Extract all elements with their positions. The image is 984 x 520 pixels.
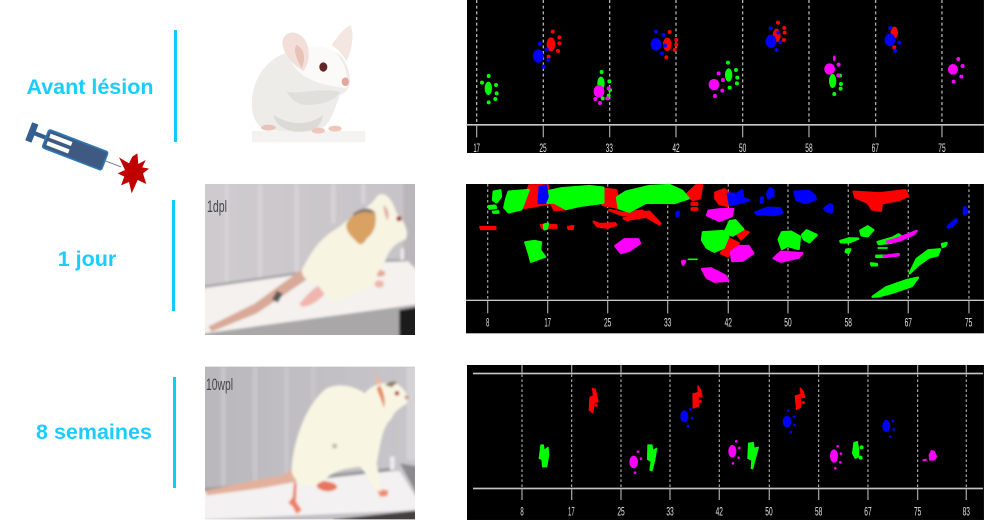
label: 8 semaines: 8 semaines bbox=[36, 420, 152, 444]
chart: gait trace before lesion: 25 bbox=[539, 142, 547, 155]
divider bar: 8 semaines bbox=[173, 377, 176, 488]
chart: gait trace 8 weeks after lesion: 67 bbox=[864, 505, 872, 518]
chart: gait trace before lesion: 42 bbox=[672, 142, 680, 155]
chart: gait trace before lesion: 75 bbox=[938, 142, 946, 155]
photo: rat 8 weeks post lesion (10wpl) bbox=[200, 360, 420, 520]
chart: gait trace 8 weeks after lesion: 50 bbox=[765, 505, 773, 518]
chart: gait trace before lesion: 67 bbox=[872, 142, 879, 155]
chart: gait trace 1 day after lesion: 75 bbox=[965, 316, 972, 329]
chart: gait trace 8 weeks after lesion bbox=[467, 365, 984, 520]
photo: rat 1 day post lesion (1dpl) bbox=[200, 180, 420, 340]
divider bar: 1 jour bbox=[172, 200, 175, 311]
chart: gait trace 1 day after lesion: 17 bbox=[544, 316, 551, 329]
chart: gait trace 1 day after lesion: 50 bbox=[784, 316, 792, 329]
chart: gait trace 1 day after lesion: 42 bbox=[725, 316, 732, 329]
chart: gait trace 1 day after lesion: 33 bbox=[664, 316, 671, 329]
label: Avant lésion: Avant lésion bbox=[26, 75, 154, 99]
chart: gait trace 8 weeks after lesion: 17 bbox=[568, 505, 575, 518]
chart: gait trace 8 weeks after lesion: 42 bbox=[716, 505, 723, 518]
chart: gait trace 1 day after lesion: 58 bbox=[845, 316, 852, 329]
chart: gait trace 1 day after lesion: 67 bbox=[905, 316, 912, 329]
chart: gait trace 8 weeks after lesion: 8 bbox=[520, 505, 524, 518]
photo caption: 10wpl: 10wpl bbox=[206, 375, 233, 394]
chart: gait trace 1 day after lesion: 8 bbox=[486, 316, 489, 329]
icon: syringe with injection burst bbox=[25, 122, 149, 193]
label: 1 jour: 1 jour bbox=[58, 247, 117, 271]
chart: gait trace before lesion bbox=[466, 0, 984, 155]
photo: white mouse before lesion bbox=[252, 26, 365, 142]
chart: gait trace 1 day after lesion bbox=[466, 184, 984, 333]
chart: gait trace 1 day after lesion: 25 bbox=[604, 316, 611, 329]
chart: gait trace 8 weeks after lesion: 58 bbox=[815, 505, 822, 518]
chart: gait trace 8 weeks after lesion: 83 bbox=[963, 505, 970, 518]
chart: gait trace before lesion: 17 bbox=[473, 142, 480, 155]
chart: gait trace 8 weeks after lesion: 33 bbox=[666, 505, 674, 518]
divider bar: Avant lésion bbox=[174, 30, 177, 142]
photo caption: 1dpl: 1dpl bbox=[207, 197, 227, 216]
chart: gait trace before lesion: 58 bbox=[805, 142, 813, 155]
chart: gait trace 8 weeks after lesion: 75 bbox=[914, 505, 921, 518]
chart: gait trace 8 weeks after lesion: 25 bbox=[617, 505, 625, 518]
chart: gait trace before lesion: 33 bbox=[606, 142, 613, 155]
chart: gait trace before lesion: 50 bbox=[739, 142, 747, 155]
